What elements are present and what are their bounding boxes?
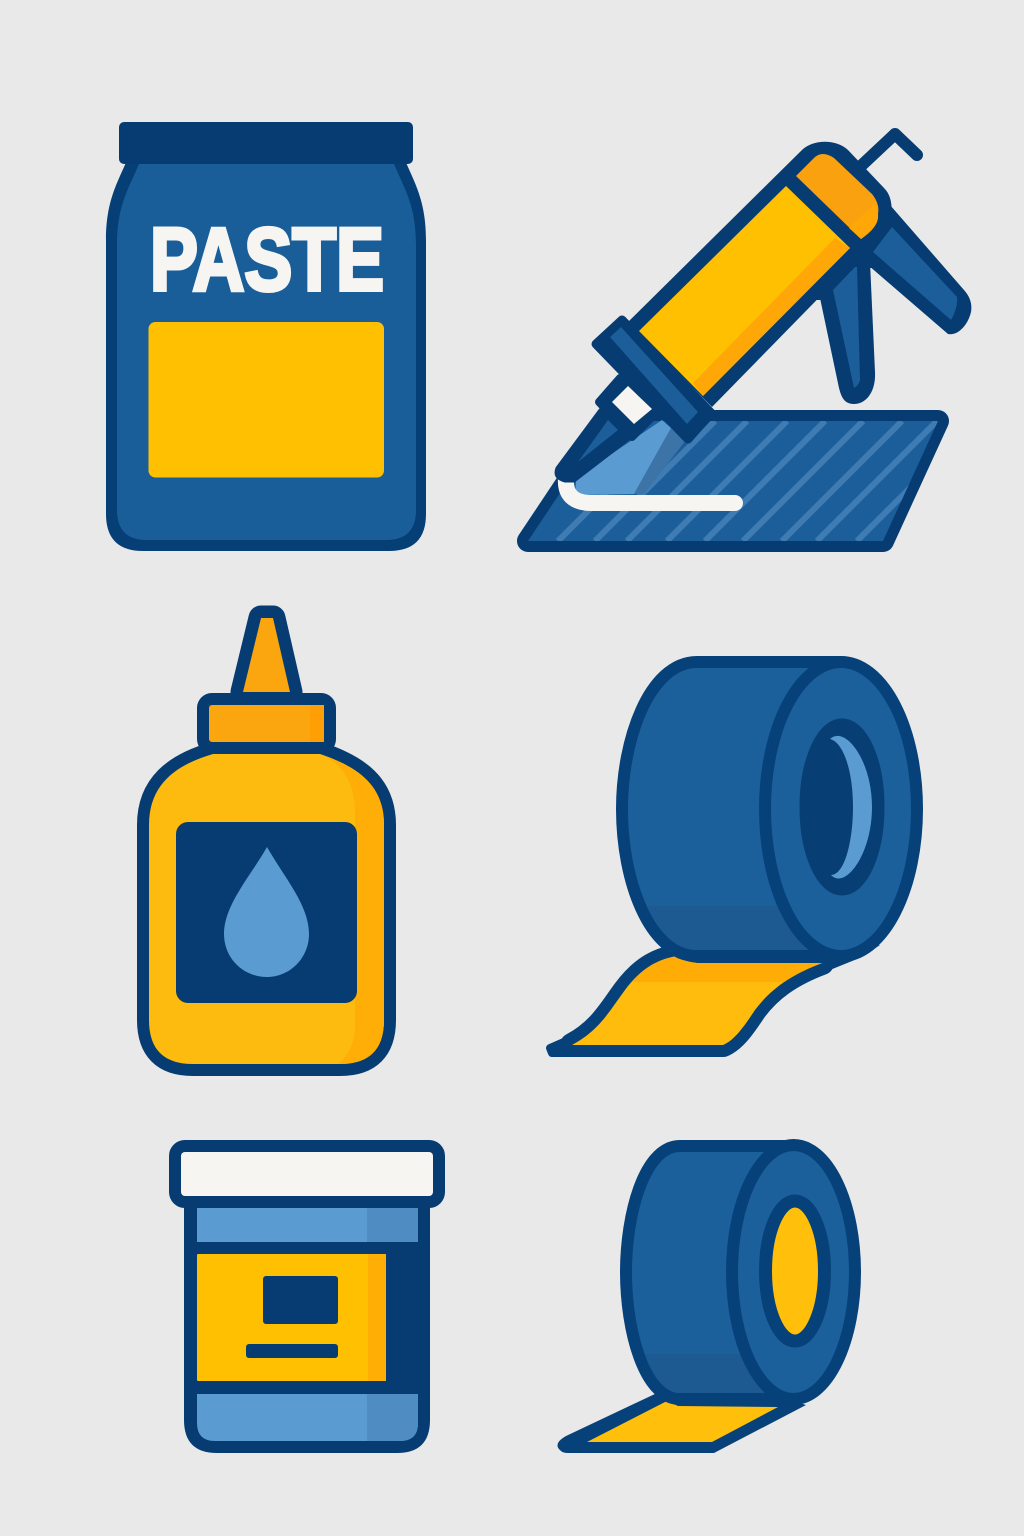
bottle cap bbox=[209, 705, 324, 742]
tub body bbox=[184, 1190, 430, 1453]
jar word: PASTE bbox=[150, 209, 384, 309]
inner core highlight bbox=[830, 736, 872, 879]
bottle nozzle bbox=[243, 618, 290, 692]
barrel end cap bbox=[796, 154, 878, 239]
small tape strip bbox=[557, 1390, 806, 1453]
hook rod bbox=[862, 134, 917, 165]
bottle label bbox=[176, 822, 357, 1003]
small tape face bbox=[732, 1145, 855, 1399]
handle hub bbox=[808, 218, 893, 300]
label line bbox=[246, 1344, 338, 1358]
icon: tub with lid bbox=[181, 1152, 433, 1453]
icon: caulk gun on surface bbox=[528, 134, 977, 541]
label mark bbox=[263, 1276, 338, 1324]
trigger handle bbox=[820, 262, 875, 404]
barrel tube bbox=[639, 186, 850, 396]
icon: water drop bbox=[224, 847, 309, 977]
tape strip bbox=[550, 945, 880, 1053]
rear handle bbox=[868, 205, 971, 334]
barrel collar bbox=[596, 320, 711, 439]
barrel outline bbox=[628, 142, 892, 407]
icon: large tape roll bbox=[550, 662, 917, 1053]
surface sheet bbox=[528, 421, 977, 541]
tape face bbox=[765, 662, 917, 956]
small tape body bbox=[632, 1152, 793, 1393]
jar label bbox=[148, 322, 384, 478]
nozzle bbox=[599, 378, 657, 437]
tub top band bbox=[197, 1208, 418, 1242]
small tape hole bbox=[766, 1201, 824, 1341]
sealant bead bbox=[566, 478, 735, 503]
jar lid bbox=[119, 122, 413, 164]
tape body bbox=[628, 668, 841, 950]
tub label bbox=[197, 1254, 386, 1381]
sealant sheen bbox=[576, 420, 671, 495]
icon: small tape roll bbox=[557, 1145, 855, 1453]
icon: glue bottle bbox=[149, 618, 384, 1064]
icon: paste jar bbox=[106, 122, 426, 551]
tub lid bbox=[181, 1152, 433, 1196]
tub bottom band bbox=[197, 1394, 418, 1441]
tape hole bbox=[806, 725, 878, 889]
bottle body bbox=[149, 754, 384, 1064]
